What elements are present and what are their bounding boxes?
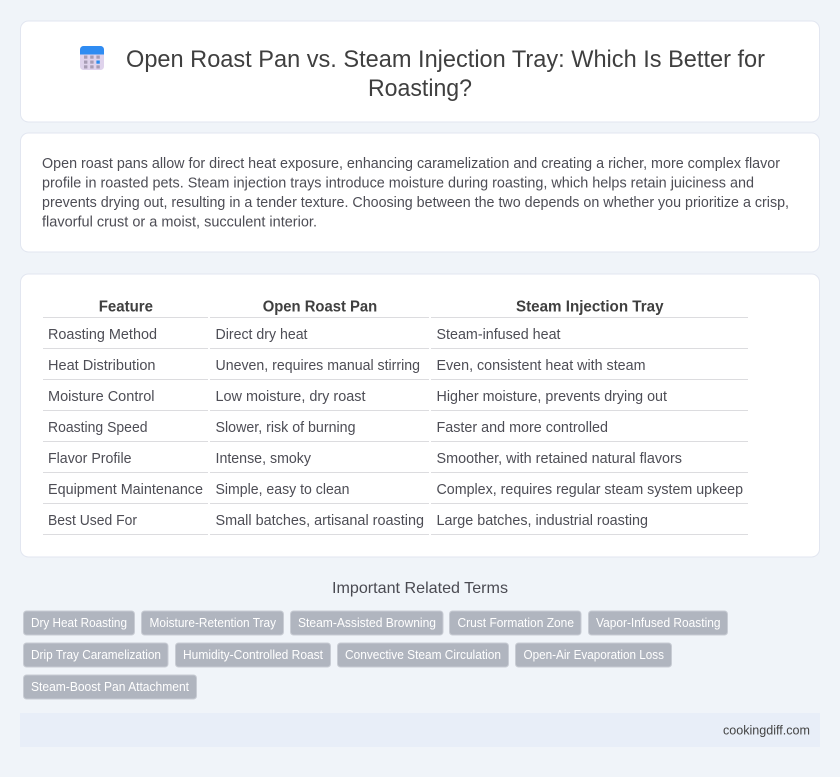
icon: calendar bbox=[80, 46, 104, 70]
related term tags: Humidity-Controlled Roast bbox=[183, 648, 324, 662]
heading: important related terms: Important Related Terms bbox=[332, 580, 508, 597]
related term tags: Steam-Assisted Browning bbox=[298, 616, 436, 630]
row: roasting speed: Faster and more controlled bbox=[436, 420, 608, 436]
row: heat distribution bbox=[48, 358, 646, 374]
row: flavor profile: Intense, smoky bbox=[216, 451, 312, 467]
title: Open Roast Pan vs. Steam Injection Tray: Which Is Better for bbox=[126, 46, 765, 73]
row: roasting speed: Slower, risk of burning bbox=[216, 420, 356, 436]
related term tags: Crust Formation Zone bbox=[458, 616, 574, 630]
row: roasting method: Steam-infused heat bbox=[436, 327, 560, 343]
row: best used for: Large batches, industrial roasting bbox=[436, 513, 648, 529]
row: roasting speed: Roasting Speed bbox=[48, 420, 148, 436]
footer bbox=[20, 713, 820, 747]
row: moisture control: Low moisture, dry roast bbox=[216, 389, 366, 405]
row: equipment maintenance: Complex, requires regular steam system upkeep bbox=[436, 482, 743, 498]
panel: introduction text bbox=[20, 133, 820, 252]
row: best used for: Small batches, artisanal roasting bbox=[216, 513, 424, 529]
row: moisture control: Moisture Control bbox=[48, 389, 154, 405]
row: roasting method: Direct dry heat bbox=[216, 327, 308, 343]
related term tags: Steam-Boost Pan Attachment bbox=[31, 680, 190, 694]
table header: Open Roast Pan bbox=[263, 298, 377, 316]
related term tags: Dry Heat Roasting bbox=[31, 616, 127, 630]
row: moisture control bbox=[48, 389, 667, 405]
panel: introduction text: prevents drying out, resulting in a tender texture. Choosing between the two depends on whether you prioritize a crisp, bbox=[42, 194, 789, 211]
row: flavor profile bbox=[48, 451, 682, 467]
related term tags: Convective Steam Circulation bbox=[345, 648, 501, 662]
row: heat distribution: Heat Distribution bbox=[48, 358, 156, 374]
panel: introduction text: profile in roasted pets. Steam injection trays introduce moisture during roasting, which helps retain juiciness and bbox=[42, 174, 754, 192]
table header: Feature bbox=[99, 298, 153, 316]
footer: cookingdiff.com bbox=[723, 722, 810, 738]
title bbox=[126, 46, 765, 102]
row: flavor profile: Smoother, with retained natural flavors bbox=[436, 451, 682, 467]
row: best used for bbox=[48, 513, 648, 529]
panel: introduction text: flavorful crust or a moist, succulent interior. bbox=[42, 214, 317, 230]
title: Roasting? bbox=[368, 75, 472, 102]
row: heat distribution: Even, consistent heat with steam bbox=[436, 358, 646, 374]
row: equipment maintenance: Simple, easy to clean bbox=[216, 482, 350, 498]
related term tags: Drip Tray Caramelization bbox=[31, 648, 161, 662]
related term tags bbox=[24, 611, 728, 699]
row: roasting method: Roasting Method bbox=[48, 327, 157, 343]
row: moisture control: Higher moisture, prevents drying out bbox=[436, 389, 667, 405]
related term tags: Moisture-Retention Tray bbox=[150, 616, 277, 630]
row: equipment maintenance bbox=[48, 482, 743, 498]
row: roasting method bbox=[48, 327, 560, 343]
row: flavor profile: Flavor Profile bbox=[48, 451, 132, 467]
table header: Steam Injection Tray bbox=[516, 298, 664, 316]
panel: comparison table bbox=[20, 274, 820, 557]
related term tags: Vapor-Infused Roasting bbox=[596, 616, 721, 630]
row: equipment maintenance: Equipment Maintenance bbox=[48, 482, 203, 498]
table header bbox=[99, 298, 664, 316]
panel: introduction text: Open roast pans allow for direct heat exposure, enhancing caramelization and creating a richer, more complex flavor bbox=[42, 155, 780, 172]
row: best used for: Best Used For bbox=[48, 513, 137, 529]
panel: title card bbox=[20, 21, 820, 122]
row: roasting speed bbox=[48, 420, 608, 436]
row: heat distribution: Uneven, requires manual stirring bbox=[216, 358, 420, 374]
related term tags: Open-Air Evaporation Loss bbox=[524, 648, 664, 662]
